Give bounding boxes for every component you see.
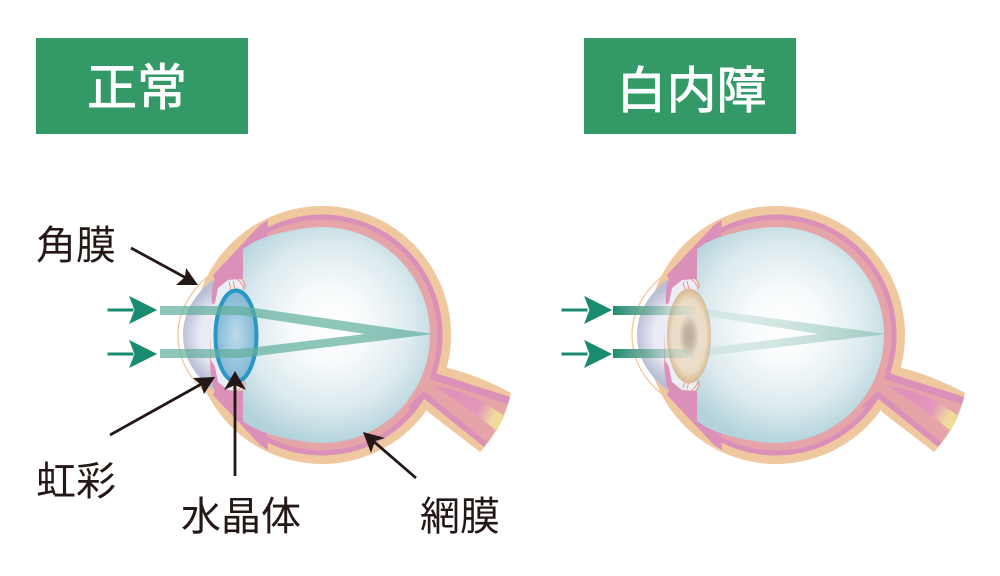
heading text: normal: 正常 [87, 60, 187, 116]
arrow: incoming light, cataract bottom [562, 341, 611, 367]
lens: clear [216, 290, 256, 382]
light rays: scattered, fading [613, 306, 887, 358]
light rays: normal eye focus on retina [160, 306, 433, 358]
arrow: incoming light, normal bottom [108, 341, 156, 367]
label: iris: 虹彩 [36, 460, 116, 504]
heading box: cataract [584, 38, 796, 134]
pointer: iris [110, 377, 215, 435]
lens: clouded [667, 288, 711, 384]
label: cornea: 角膜 [36, 224, 116, 268]
arrow: incoming light, cataract top [562, 297, 611, 323]
pointer: lens [224, 371, 246, 476]
pointer: retina [363, 432, 416, 478]
arrow: incoming light, normal top [108, 297, 156, 323]
heading box: normal [36, 38, 248, 134]
heading text: cataract: 白内障 [616, 63, 766, 119]
label: lens: 水晶体 [181, 495, 301, 539]
diagram: cataract eye [613, 206, 965, 464]
label: retina: 網膜 [420, 495, 500, 539]
pointer: cornea [131, 248, 198, 285]
diagram: normal eye [160, 206, 511, 464]
